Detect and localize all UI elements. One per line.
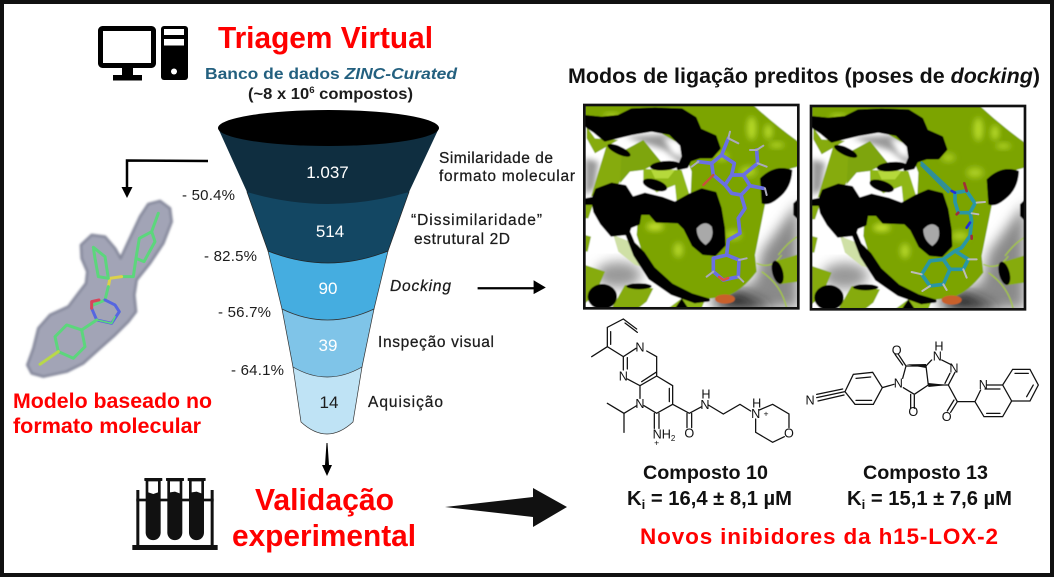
structure: compound 10: N <box>635 397 645 411</box>
funnel values: 1.037 <box>306 163 349 182</box>
structure: compound 13: N <box>894 377 903 391</box>
funnel stage labels: formato molecular <box>439 168 575 185</box>
funnel stage 5 <box>293 367 362 434</box>
funnel stage labels: “Dissimilaridade” <box>411 212 542 229</box>
icon: computer <box>100 26 188 80</box>
structure: compound 10: N <box>619 369 628 383</box>
tube 1 <box>144 478 162 540</box>
funnel stage 3 <box>268 251 388 320</box>
structure: compound 10: + <box>654 438 659 448</box>
structure: compound 13: N <box>805 393 815 407</box>
structure: compound 10: 2 <box>671 434 676 443</box>
structure: compound 10: N <box>635 340 645 354</box>
compound count: 6 <box>309 85 315 95</box>
structure: compound 13: N <box>949 361 959 375</box>
funnel stage labels <box>368 150 575 411</box>
caption: shape model <box>13 389 212 438</box>
caption: compound 13 <box>847 463 1012 512</box>
funnel stage labels: Inspeção visual <box>378 334 494 351</box>
funnel values: 39 <box>319 336 337 355</box>
panel: docking pose compound 13 <box>811 106 1025 310</box>
ligand sticks <box>40 213 158 364</box>
caption: new inhibitors: Novos inibidores da h15-LOX-2 <box>640 524 998 549</box>
funnel values: 14 <box>320 393 338 412</box>
tube 3 <box>188 478 206 540</box>
structure: compound 10 <box>592 319 794 448</box>
molecular shape model <box>27 201 172 377</box>
arrow: funnel to shape model <box>122 160 208 198</box>
structure: compound 10: H <box>752 397 761 411</box>
funnel stage 1 <box>218 128 439 204</box>
structure: compound 10: H <box>701 387 711 401</box>
panel: docking pose compound 10 <box>584 105 798 309</box>
structure: compound 10: O <box>784 427 794 441</box>
arrow: docking to poses <box>478 281 545 294</box>
caption: compound 10: K <box>627 488 641 510</box>
funnel stage labels: Docking <box>390 278 451 295</box>
funnel values: 90 <box>319 279 337 298</box>
reduction percentages: - 56.7% <box>218 304 271 321</box>
funnel stage 2 <box>247 192 409 263</box>
reduction percentages: - 82.5% <box>204 248 257 265</box>
funnel <box>218 110 439 434</box>
caption: compound 10 <box>627 463 792 512</box>
funnel stage labels: Similaridade de <box>439 150 553 167</box>
structure: compound 13: O <box>908 405 918 419</box>
compound count: compostos) <box>315 86 413 103</box>
reduction percentages <box>182 187 284 379</box>
caption: compound 13: i <box>862 497 865 512</box>
reduction percentages: - 64.1% <box>231 362 284 379</box>
structure: compound 10: + <box>763 409 769 419</box>
structure: compound 10: O <box>684 427 694 441</box>
database subtitle: Banco de dados ZINC-Curated <box>205 66 458 83</box>
caption: compound 10: i <box>642 497 645 512</box>
heading: experimental validation: Validação <box>255 483 394 517</box>
structure: compound 13: H <box>934 339 944 353</box>
ligand pose 13 <box>912 163 985 291</box>
caption: compound 13: = 15,1 ± 7,6 µM <box>865 488 1012 510</box>
structure: compound 10: N <box>751 407 760 421</box>
caption: compound 10: Composto 10 <box>643 463 768 484</box>
ligand pose 10 <box>692 132 767 282</box>
reduction percentages: - 50.4% <box>182 187 235 204</box>
structure: compound 13 <box>805 339 1038 424</box>
arrow: validation to inhibitors <box>445 488 567 527</box>
arrow: funnel to validation <box>322 443 332 476</box>
tube 2 <box>166 478 184 540</box>
heading: experimental validation <box>232 483 416 553</box>
icon: test tubes <box>132 478 218 550</box>
structure: compound 10: NH <box>653 427 671 441</box>
structure: compound 13: O <box>892 343 902 357</box>
structure: compound 13: N <box>979 378 988 392</box>
title: Triagem Virtual <box>218 20 433 55</box>
funnel stage labels: Aquisição <box>368 394 443 411</box>
heading: experimental validation: experimental <box>232 519 416 553</box>
funnel stage 4 <box>282 309 374 377</box>
heading: predicted poses: Modos de ligação preditos (poses de docking) <box>568 65 1040 88</box>
funnel mouth <box>218 110 439 146</box>
structure: compound 13: O <box>942 410 952 424</box>
caption: compound 13: Composto 13 <box>863 463 988 484</box>
funnel values <box>306 163 349 412</box>
compound count: (~8 x 10 <box>248 86 305 103</box>
structure: compound 13: N <box>933 350 942 364</box>
caption: compound 10: = 16,4 ± 8,1 µM <box>645 488 792 510</box>
caption: compound 13: K <box>847 488 861 510</box>
caption: shape model: Modelo baseado no <box>13 389 212 413</box>
funnel values: 514 <box>316 222 344 241</box>
caption: shape model: formato molecular <box>13 414 202 438</box>
structure: compound 10: N <box>700 398 710 412</box>
surface blob <box>27 201 172 377</box>
funnel stage labels: estrutural 2D <box>414 231 510 248</box>
